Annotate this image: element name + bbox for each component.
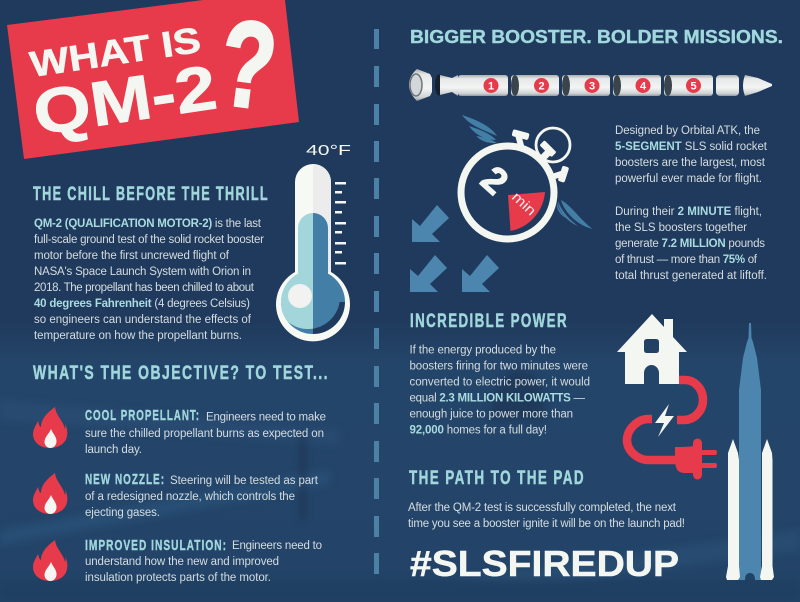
left booster xyxy=(726,439,740,580)
item text: sure the chilled propellant burns as expected on xyxy=(85,428,324,440)
item text: Engineers need to xyxy=(232,540,322,552)
segment 1 xyxy=(458,75,508,96)
arrow: down-left lower right xyxy=(462,255,499,292)
text block: incredible power: boosters firing for two minutes were xyxy=(410,360,588,372)
title line: WHAT IS: WHAT IS xyxy=(27,19,203,85)
forward skirt xyxy=(716,75,739,96)
text block: booster description xyxy=(615,125,768,185)
red cord xyxy=(627,380,703,460)
wing: right xyxy=(557,200,593,229)
segment 5: 5 xyxy=(690,80,697,92)
item heading: COOL PROPELLANT: xyxy=(85,407,200,424)
text block: QM-2 description: so engineers can understand the effects of xyxy=(34,314,252,326)
icon: house with plug cord xyxy=(617,314,717,480)
text block: thrust: generate 7.2 MILLION pounds xyxy=(615,238,765,250)
text block: QM-2 description: 2018. The propellant has been chilled to about xyxy=(34,282,255,294)
text block: QM-2 description: motor before the first uncrewed flight of xyxy=(34,250,230,262)
dial xyxy=(461,146,554,239)
plug xyxy=(675,438,717,480)
label: 40°F: 40°F xyxy=(306,142,351,159)
heading: The path to the pad: THE PATH TO THE PAD xyxy=(409,468,585,489)
hashtag: #SLSFIREDUP: #SLSFIREDUP xyxy=(410,543,679,584)
text block: booster description: 5-SEGMENT SLS solid rocket xyxy=(615,141,768,153)
icon: flame xyxy=(33,473,67,514)
segment 2 xyxy=(511,75,559,96)
text block: thrust: of thrust — more than 75% of xyxy=(615,254,758,266)
text block: QM-2 description: temperature on how the propellant burns. xyxy=(34,330,242,342)
nose cone xyxy=(743,75,772,96)
text block: path to the pad xyxy=(408,502,685,530)
diagram: exploded booster segments xyxy=(409,69,772,101)
icon: stopwatch with wings xyxy=(461,115,593,239)
text block: thrust: During their 2 MINUTE flight, xyxy=(615,206,762,218)
segment 3 xyxy=(562,75,610,96)
icon: flame xyxy=(33,540,67,581)
text block: booster description: powerful ever made for flight. xyxy=(615,173,762,185)
segment 3: 3 xyxy=(589,80,595,92)
text block: path to the pad: After the QM-2 test is successfully completed, the next xyxy=(408,502,677,514)
icon: thermometer xyxy=(276,144,350,342)
item text: of a redesigned nozzle, which controls the xyxy=(85,491,295,503)
segment 2: 2 xyxy=(538,80,545,92)
text block: thrust: total thrust generated at liftoff. xyxy=(615,270,767,282)
text block: incredible power: enough juice to power more than xyxy=(410,408,573,420)
title line: QM-2: QM-2 xyxy=(29,52,221,149)
item text: Engineers need to make xyxy=(206,412,326,424)
item text: launch day. xyxy=(85,444,142,456)
heading: The chill before the thrill: THE CHILL BEFORE THE THRILL xyxy=(33,184,269,205)
wing: left xyxy=(462,115,497,143)
objective: improved insulation xyxy=(33,537,322,584)
text block: booster description: boosters are the largest, most xyxy=(615,157,766,169)
text block: path to the pad: time you see a booster ignite it will be on the launch pad! xyxy=(408,518,685,530)
item text: ejecting gases. xyxy=(85,507,160,519)
numeral 2: 2 xyxy=(473,158,516,202)
text block: QM-2 description: full-scale ground test of the solid rocket booster xyxy=(34,234,264,246)
item text: understand how the new and improved xyxy=(85,556,279,568)
item heading: NEW NOZZLE: xyxy=(85,471,165,488)
heading: Bigger booster, bolder missions: BIGGER BOOSTER. BOLDER MISSIONS. xyxy=(410,26,783,47)
icon: flame xyxy=(33,407,67,448)
label: min: min xyxy=(509,188,540,219)
arrow: down-left top xyxy=(412,205,449,242)
text block: incredible power: 92,000 homes for a full day! xyxy=(410,424,547,436)
item text: Steering will be tested as part xyxy=(170,475,319,487)
text block: incredible power: converted to electric power, it would xyxy=(410,376,590,388)
heading: Incredible power: INCREDIBLE POWER xyxy=(410,311,568,332)
objective: new nozzle xyxy=(33,471,319,519)
heading: What's the objective?: WHAT'S THE OBJECTIVE? TO TEST... xyxy=(33,363,329,384)
text block: incredible power: If the energy produced by the xyxy=(410,344,556,356)
core stage xyxy=(738,323,762,580)
text block: QM-2 description: QM-2 (QUALIFICATION MOTOR-2) is the last xyxy=(34,218,262,230)
text block: thrust: the SLS boosters together xyxy=(615,222,747,234)
house xyxy=(617,314,687,384)
crown buttons xyxy=(511,129,569,183)
text block: booster description: Designed by Orbital ATK, the xyxy=(615,125,760,137)
title banner: What is QM-2? xyxy=(7,0,299,159)
right booster xyxy=(760,439,774,580)
center dashed divider xyxy=(374,29,379,574)
icon: SLS rocket xyxy=(726,323,774,580)
segment 5 xyxy=(664,75,713,96)
crown ring xyxy=(536,128,570,162)
segment 1: 1 xyxy=(488,80,494,92)
text block: QM-2 description xyxy=(34,218,264,342)
arrow: down-left lower left xyxy=(410,255,447,292)
text block: thrust xyxy=(615,206,767,282)
text block: QM-2 description: NASA's Space Launch System with Orion in xyxy=(34,266,251,278)
item heading: IMPROVED INSULATION: xyxy=(85,537,227,554)
item text xyxy=(85,540,322,584)
red sector: 2 minutes xyxy=(508,192,545,231)
lightning bolt xyxy=(655,404,674,437)
text block: QM-2 description: 40 degrees Fahrenheit (4 degrees Celsius) xyxy=(34,298,250,310)
text block: incredible power: equal 2.3 MILLION KILOWATTS — xyxy=(410,392,586,404)
text block: incredible power xyxy=(410,344,590,436)
item text xyxy=(85,412,326,456)
segment 4 xyxy=(613,75,661,96)
item text xyxy=(85,475,319,519)
item text: insulation protects parts of the motor. xyxy=(85,572,271,584)
nozzle ring xyxy=(409,69,458,101)
segment 4: 4 xyxy=(640,80,647,92)
objective: cool propellant xyxy=(33,407,326,456)
